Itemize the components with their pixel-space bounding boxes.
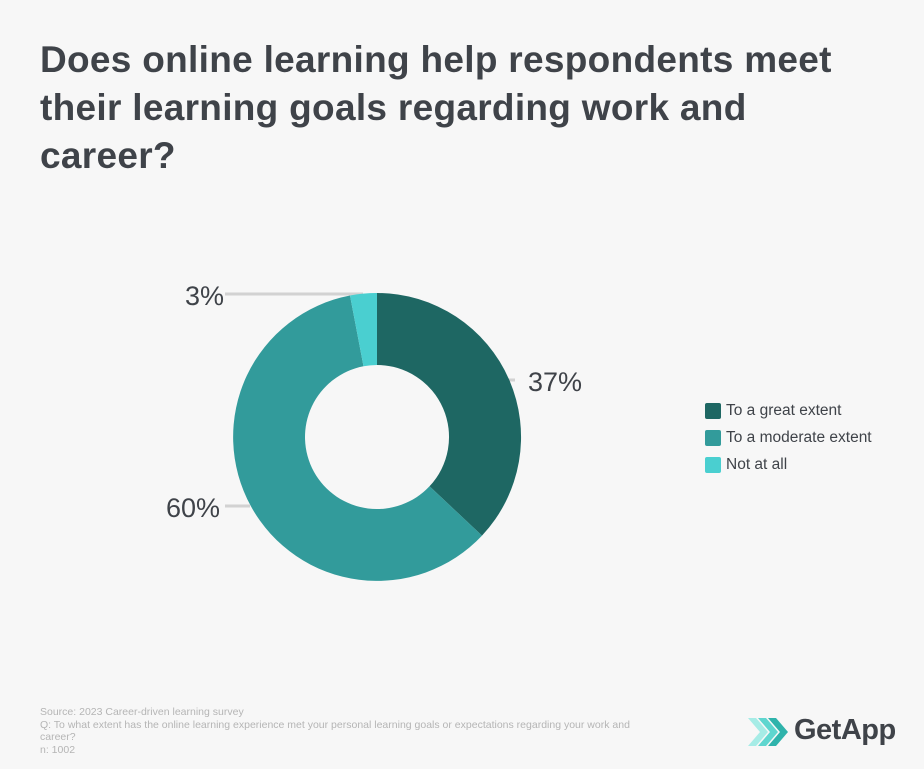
slice: great extent bbox=[377, 293, 521, 536]
slice: moderate extent bbox=[233, 296, 482, 581]
labels: 60% bbox=[166, 493, 220, 523]
logo: GetApp bbox=[794, 714, 896, 746]
labels bbox=[166, 281, 582, 523]
legend: To a moderate extent bbox=[726, 428, 872, 446]
slice: not at all bbox=[350, 293, 377, 366]
legend bbox=[705, 402, 872, 473]
footer source: Source: 2023 Career-driven learning survey bbox=[40, 706, 244, 718]
footer source bbox=[40, 706, 630, 756]
labels: 3% bbox=[185, 281, 224, 311]
leader lines bbox=[225, 294, 515, 506]
labels: 37% bbox=[528, 367, 582, 397]
footer source: n: 1002 bbox=[40, 744, 75, 756]
logo bbox=[748, 714, 896, 746]
legend: Not at all bbox=[726, 456, 787, 472]
title: Does online learning help respondents meet their learning goals regarding work and career? bbox=[40, 39, 832, 176]
footer source: Q: To what extent has the online learning experience met your personal learning goals or expectations regarding your work and career? bbox=[40, 718, 630, 743]
legend: To a great extent bbox=[726, 402, 841, 418]
